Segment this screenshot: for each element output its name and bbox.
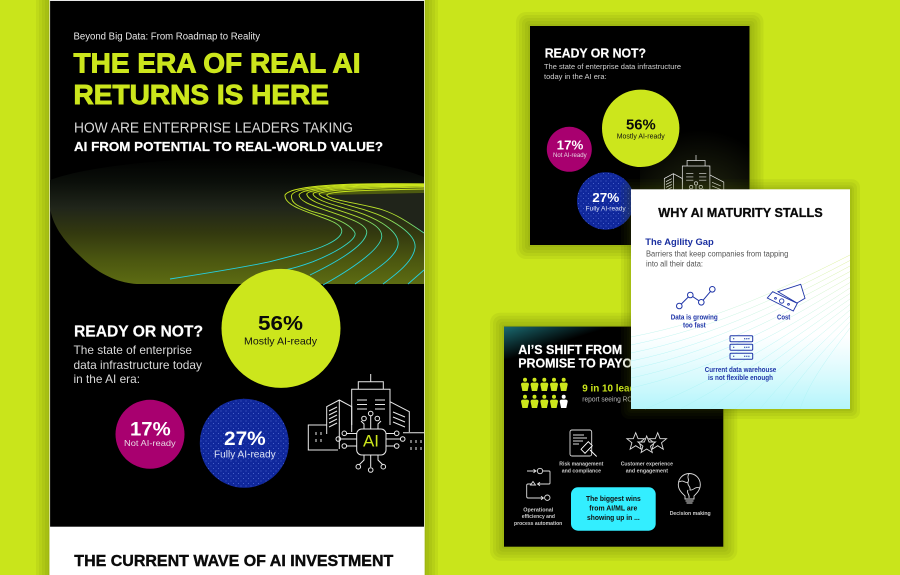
chart: 27% fully AI-ready <box>200 399 289 488</box>
callout: The biggest wins <box>586 494 641 503</box>
body text <box>74 343 202 386</box>
panel: ready or not card <box>516 12 764 259</box>
panel heading <box>518 342 647 371</box>
icon: nine of ten people <box>521 378 568 408</box>
stat text <box>582 383 650 404</box>
label: risk: Risk management <box>559 462 603 468</box>
subtitle: HOW ARE ENTERPRISE LEADERS TAKING <box>74 121 353 137</box>
illustration: road swoosh <box>50 157 424 285</box>
callout <box>571 487 656 531</box>
icon: money bills <box>767 284 805 311</box>
label: data warehouse: is not flexible enough <box>708 375 773 382</box>
label: data warehouse <box>705 367 776 382</box>
chart: 17%: 17% <box>557 138 584 153</box>
icon: stars <box>627 433 666 452</box>
title <box>74 48 360 110</box>
chart: 56%: Mostly AI-ready <box>617 134 665 141</box>
callout: from AI/ML are <box>589 504 637 513</box>
label: risk: and compliance <box>562 468 602 474</box>
label: operational: efficiency and <box>522 514 555 520</box>
panel: why AI maturity stalls <box>621 179 860 419</box>
title: RETURNS IS HERE <box>74 79 329 110</box>
icon: server stack <box>730 336 753 359</box>
icon: AI city: AI <box>363 432 379 450</box>
stat text: 9 in 10 leaders <box>582 383 650 395</box>
panel: main infographic <box>36 0 438 575</box>
subtitle <box>74 121 383 154</box>
label: data warehouse: Current data warehouse <box>705 367 776 374</box>
label: operational: process automation <box>514 521 563 527</box>
chart: 56% <box>602 90 679 167</box>
label: decision making: Decision making <box>670 511 711 517</box>
label: data growing <box>671 315 718 330</box>
card title: WHY AI MATURITY STALLS <box>658 205 823 220</box>
subtitle: AI FROM POTENTIAL TO REAL-WORLD VALUE? <box>74 139 383 154</box>
icon: AI city <box>308 374 424 472</box>
footer section <box>50 527 424 575</box>
label: customer experience: and engagement <box>626 468 668 474</box>
body text: in the AI era: <box>74 372 140 386</box>
icon: risk document <box>570 430 597 456</box>
callout: showing up in ... <box>587 513 640 522</box>
body text: The state of enterprise <box>74 343 192 357</box>
panel: AI's shift from promise to payoff <box>490 313 737 561</box>
icon: AI city small <box>651 155 734 226</box>
icon: growth line <box>676 286 715 309</box>
card body text <box>544 62 681 81</box>
label: data growing: Data is growing <box>671 315 718 322</box>
label: operational <box>514 507 563 527</box>
chart: 56% mostly AI-ready <box>222 269 340 388</box>
description: into all their data: <box>646 259 703 268</box>
chart: 56% mostly AI-ready: 56% <box>258 312 303 335</box>
label: data growing: too fast <box>683 323 706 330</box>
eyebrow text: Beyond Big Data: From Roadmap to Reality <box>74 32 260 42</box>
label: cost: Cost <box>777 315 791 322</box>
chart: 27% fully AI-ready: 27% <box>224 429 266 450</box>
label: operational: Operational <box>523 507 554 513</box>
chart: 27%: 27% <box>592 190 620 205</box>
chart: 56%: 56% <box>626 117 656 133</box>
label: risk <box>559 462 603 474</box>
description <box>646 249 788 268</box>
chart: 27% fully AI-ready: Fully AI-ready <box>214 449 276 460</box>
body text: data infrastructure today <box>74 358 202 372</box>
chart: 17% not AI-ready: Not AI-ready <box>124 438 177 448</box>
card body text: today in the AI era: <box>544 72 607 81</box>
subheading: The Agility Gap <box>645 237 714 248</box>
chart: 17% not AI-ready: 17% <box>130 420 171 441</box>
title: THE ERA OF REAL AI <box>74 48 360 79</box>
stat text: report seeing ROI <box>582 395 634 404</box>
panel heading: PROMISE TO PAYOFF <box>518 356 647 371</box>
chart: 56% mostly AI-ready: Mostly AI-ready <box>244 336 318 348</box>
chart: 17% <box>547 127 592 172</box>
card heading: READY OR NOT? <box>545 45 646 60</box>
icon: puzzle bulb <box>678 474 700 503</box>
heading: ready or not: READY OR NOT? <box>74 324 203 341</box>
chart: 27% <box>577 172 634 230</box>
card body text: The state of enterprise data infrastructure <box>544 62 681 71</box>
panel heading: AI’S SHIFT FROM <box>518 342 622 357</box>
label: customer experience <box>621 462 674 474</box>
chart: 17% not AI-ready <box>116 400 184 469</box>
icon: process flow <box>527 468 550 500</box>
description: Barriers that keep companies from tapping <box>646 249 788 258</box>
chart: 17%: Not AI-ready <box>553 153 587 159</box>
label: customer experience: Customer experience <box>621 462 674 468</box>
section heading: THE CURRENT WAVE OF AI INVESTMENT <box>74 553 394 570</box>
chart: 27%: Fully AI-ready <box>586 205 626 212</box>
